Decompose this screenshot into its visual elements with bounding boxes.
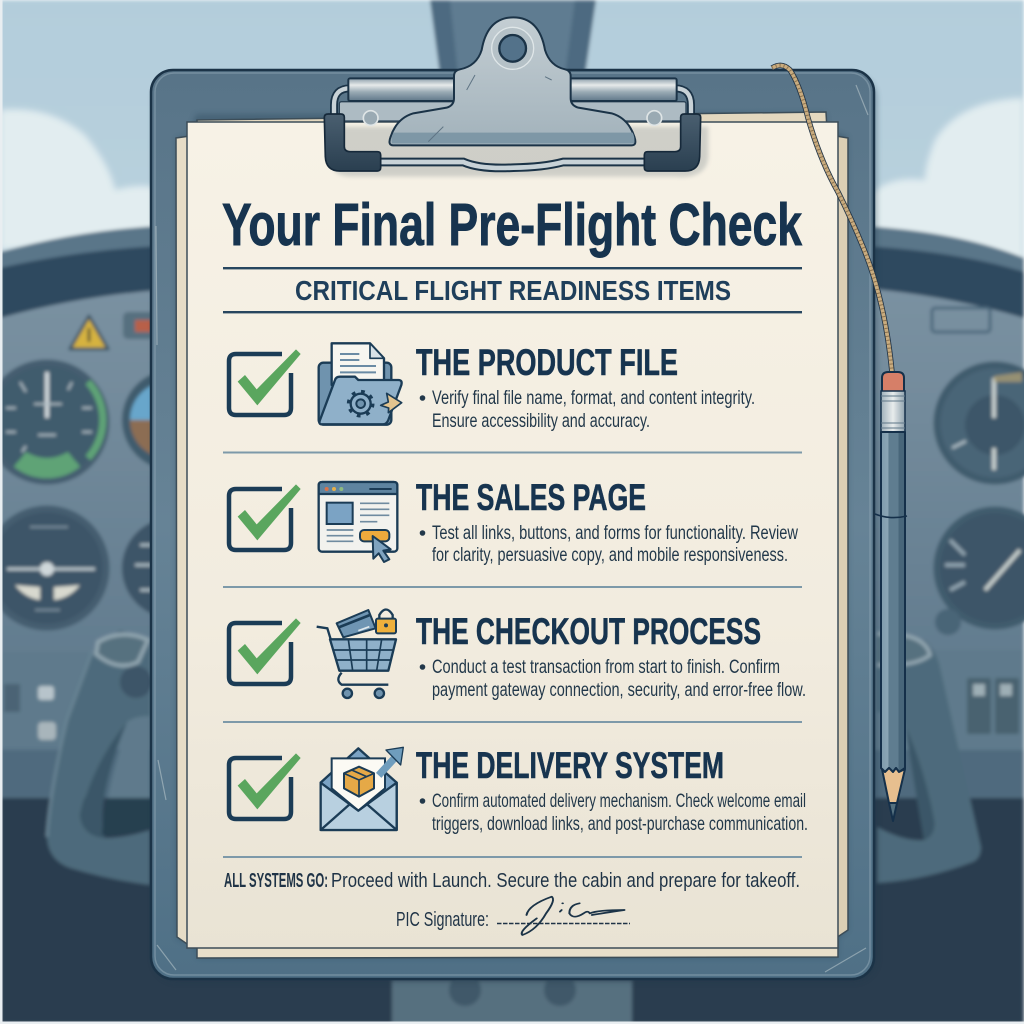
warning triangle <box>70 316 108 349</box>
wire hinges <box>334 88 691 117</box>
bottom wire <box>380 162 645 168</box>
barrel <box>881 432 905 772</box>
description <box>420 388 755 432</box>
lead <box>889 803 897 821</box>
description: Ensure accessibility and accuracy. <box>432 411 650 432</box>
heading: THE DELIVERY SYSTEM <box>416 745 724 786</box>
yoke right <box>877 640 981 883</box>
title: Your Final Pre-Flight Check <box>222 192 802 258</box>
divider <box>223 452 802 454</box>
heading: THE SALES PAGE <box>416 477 646 518</box>
icon: browser window <box>319 482 397 562</box>
footer statement: ALL SYSTEMS GO: <box>224 870 328 892</box>
front sheet <box>187 122 838 948</box>
description: Conduct a test transaction from start to finish. Confirm <box>432 657 780 678</box>
description: for clarity, persuasive copy, and mobile responsiveness. <box>432 545 788 566</box>
heading: THE CHECKOUT PROCESS <box>416 611 761 652</box>
metal clip <box>324 17 708 177</box>
description <box>420 657 806 701</box>
clip base plate <box>339 102 686 121</box>
checkbox 4 <box>229 753 301 819</box>
clip plate <box>389 17 635 145</box>
signature line <box>396 897 630 935</box>
lower panel: switches <box>0 652 160 747</box>
icon: shopping cart <box>317 609 396 698</box>
description: Verify final file name, format, and content integrity. <box>432 388 755 409</box>
yoke left <box>47 630 150 885</box>
divider <box>223 586 802 588</box>
eraser <box>882 372 904 392</box>
description: payment gateway connection, security, and error-free flow. <box>432 680 806 701</box>
divider <box>223 856 802 858</box>
item 1: the product file <box>229 342 755 432</box>
icon: envelope with parcel <box>321 747 403 830</box>
wood tip <box>882 768 905 803</box>
footer statement: Proceed with Launch. Secure the cabin and prepare for takeoff. <box>331 870 800 892</box>
rule above subtitle <box>223 267 802 269</box>
checkbox 3 <box>229 618 301 684</box>
description: Test all links, buttons, and forms for functionality. Review <box>432 523 798 544</box>
glareshield <box>0 226 160 320</box>
divider <box>223 721 802 723</box>
instrument panel <box>0 288 1024 800</box>
paper stack <box>176 112 848 958</box>
description <box>420 791 808 835</box>
rule below subtitle <box>223 311 802 313</box>
rollers <box>348 78 455 101</box>
icon: folder with gear <box>319 343 402 425</box>
ferrule <box>881 391 905 432</box>
gauges left <box>0 363 106 481</box>
checkbox 1 <box>229 349 301 415</box>
description: triggers, download links, and post-purchase communication. <box>432 814 808 835</box>
item 2: the sales page <box>229 477 798 566</box>
pencil cord <box>772 65 892 372</box>
bottom centre console <box>392 980 632 1024</box>
window pillar <box>430 0 596 75</box>
pencil <box>875 372 907 821</box>
signature scrawl <box>522 897 624 935</box>
lower cockpit <box>0 798 1024 1024</box>
clouds <box>0 98 1024 270</box>
description: Confirm automated delivery mechanism. Check welcome email <box>432 791 806 812</box>
gauges right <box>937 365 1024 481</box>
clipboard board <box>151 70 877 982</box>
checkbox 2 <box>229 484 301 550</box>
signature line: PIC Signature: <box>396 909 489 931</box>
rubber grips <box>324 114 381 171</box>
band strap <box>875 514 907 518</box>
item 3: the checkout process <box>229 609 806 701</box>
item 4: the delivery system <box>229 745 808 835</box>
heading: THE PRODUCT FILE <box>416 342 678 383</box>
description <box>420 523 798 566</box>
subtitle: CRITICAL FLIGHT READINESS ITEMS <box>295 275 731 306</box>
